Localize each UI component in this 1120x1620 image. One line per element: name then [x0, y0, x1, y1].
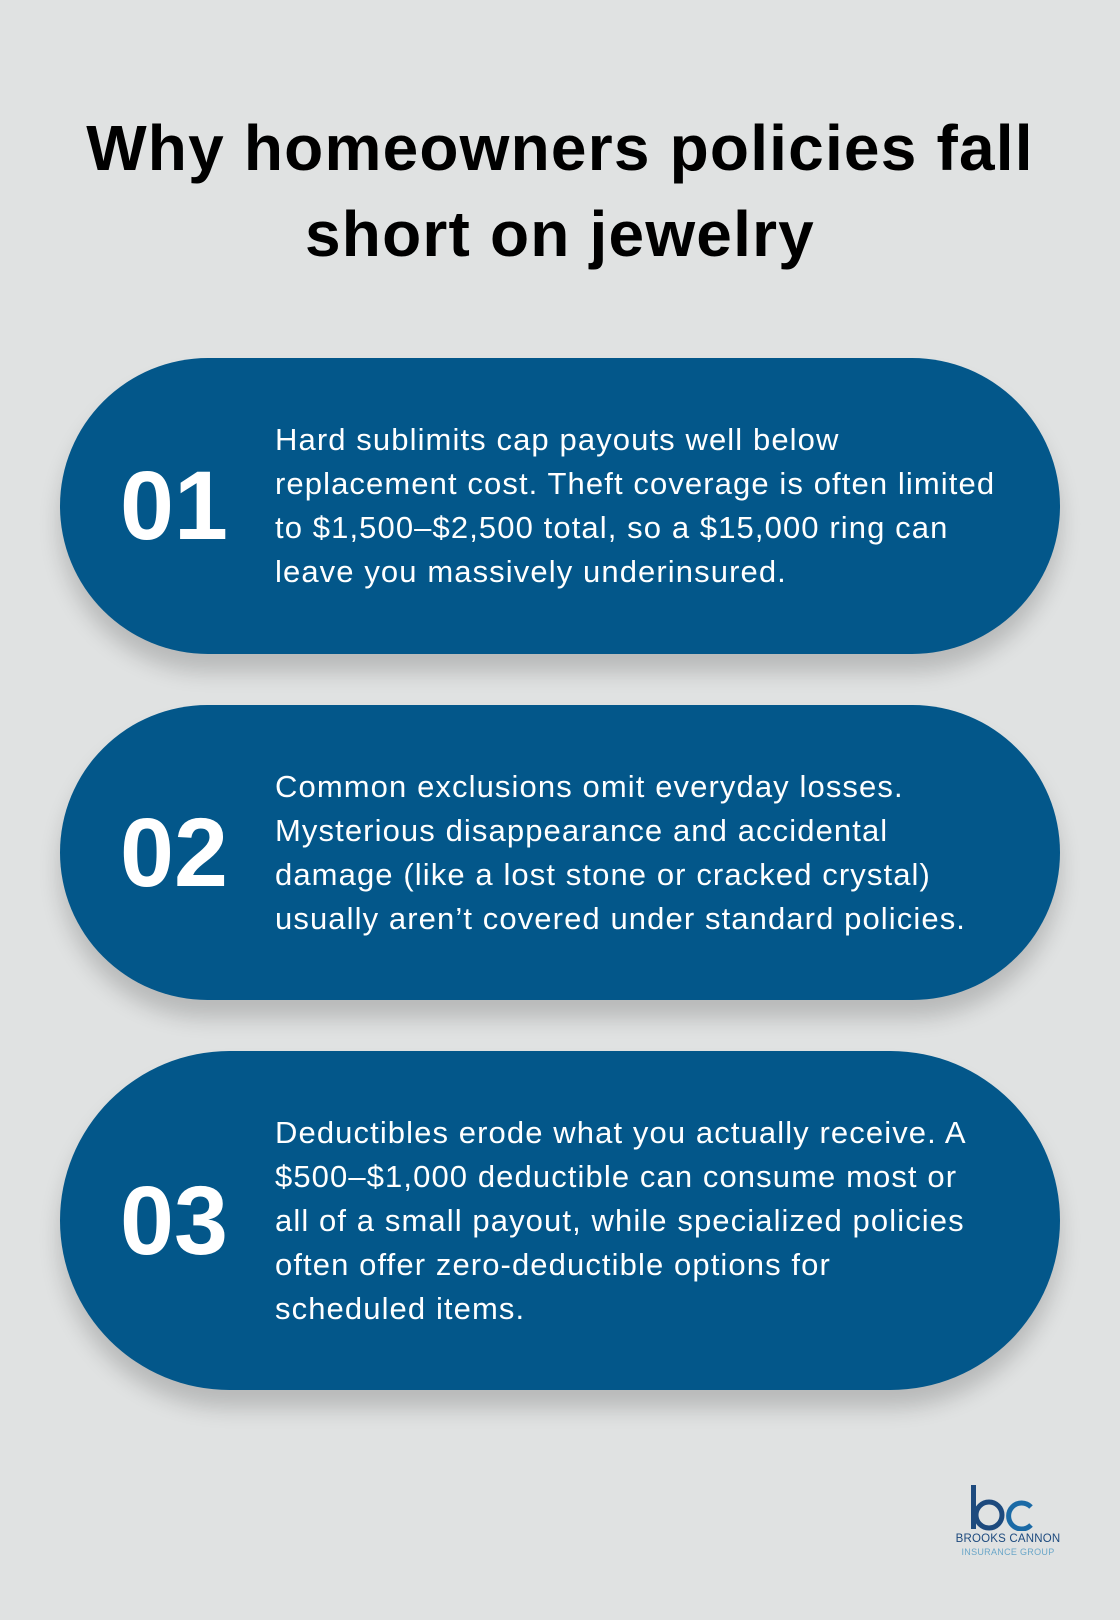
- text 03: scheduled items.: [275, 1290, 525, 1326]
- number 03: 03: [120, 1166, 228, 1274]
- text 02: Mysterious disappearance and accidental: [275, 812, 888, 848]
- logo text: BROOKS CANNON: [956, 1533, 1060, 1545]
- number 02: 02: [120, 798, 228, 906]
- text 03: often offer zero-deductible options for: [275, 1246, 831, 1282]
- text 01: replacement cost. Theft coverage is often limited: [275, 466, 995, 501]
- logo text: [956, 1533, 1060, 1557]
- text 01: [275, 422, 995, 589]
- text 02: Common exclusions omit everyday losses.: [275, 768, 904, 804]
- text 02: [275, 768, 966, 936]
- text 03: $500–$1,000 deductible can consume most or: [275, 1158, 957, 1194]
- text 02: damage (like a lost stone or cracked crystal): [275, 856, 931, 892]
- title: short on jewelry: [305, 198, 815, 270]
- text 01: leave you massively underinsured.: [275, 554, 787, 589]
- logo: [956, 1485, 1060, 1557]
- panel: item 03: [60, 1051, 1060, 1390]
- icon: bc mark: [971, 1485, 1033, 1531]
- number 01: 01: [120, 451, 228, 560]
- text 03: [275, 1114, 967, 1326]
- title: [86, 112, 1034, 270]
- panel: item 02: [60, 705, 1060, 1000]
- text 02: usually aren’t covered under standard policies.: [275, 900, 966, 936]
- text 01: to $1,500–$2,500 total, so a $15,000 ring can: [275, 510, 948, 545]
- logo text: INSURANCE GROUP: [961, 1547, 1054, 1557]
- title: Why homeowners policies fall: [86, 112, 1034, 184]
- text 03: all of a small payout, while specialized policies: [275, 1202, 965, 1238]
- text 03: Deductibles erode what you actually receive. A: [275, 1114, 967, 1150]
- panel: item 01: [60, 358, 1060, 654]
- text 01: Hard sublimits cap payouts well below: [275, 422, 840, 457]
